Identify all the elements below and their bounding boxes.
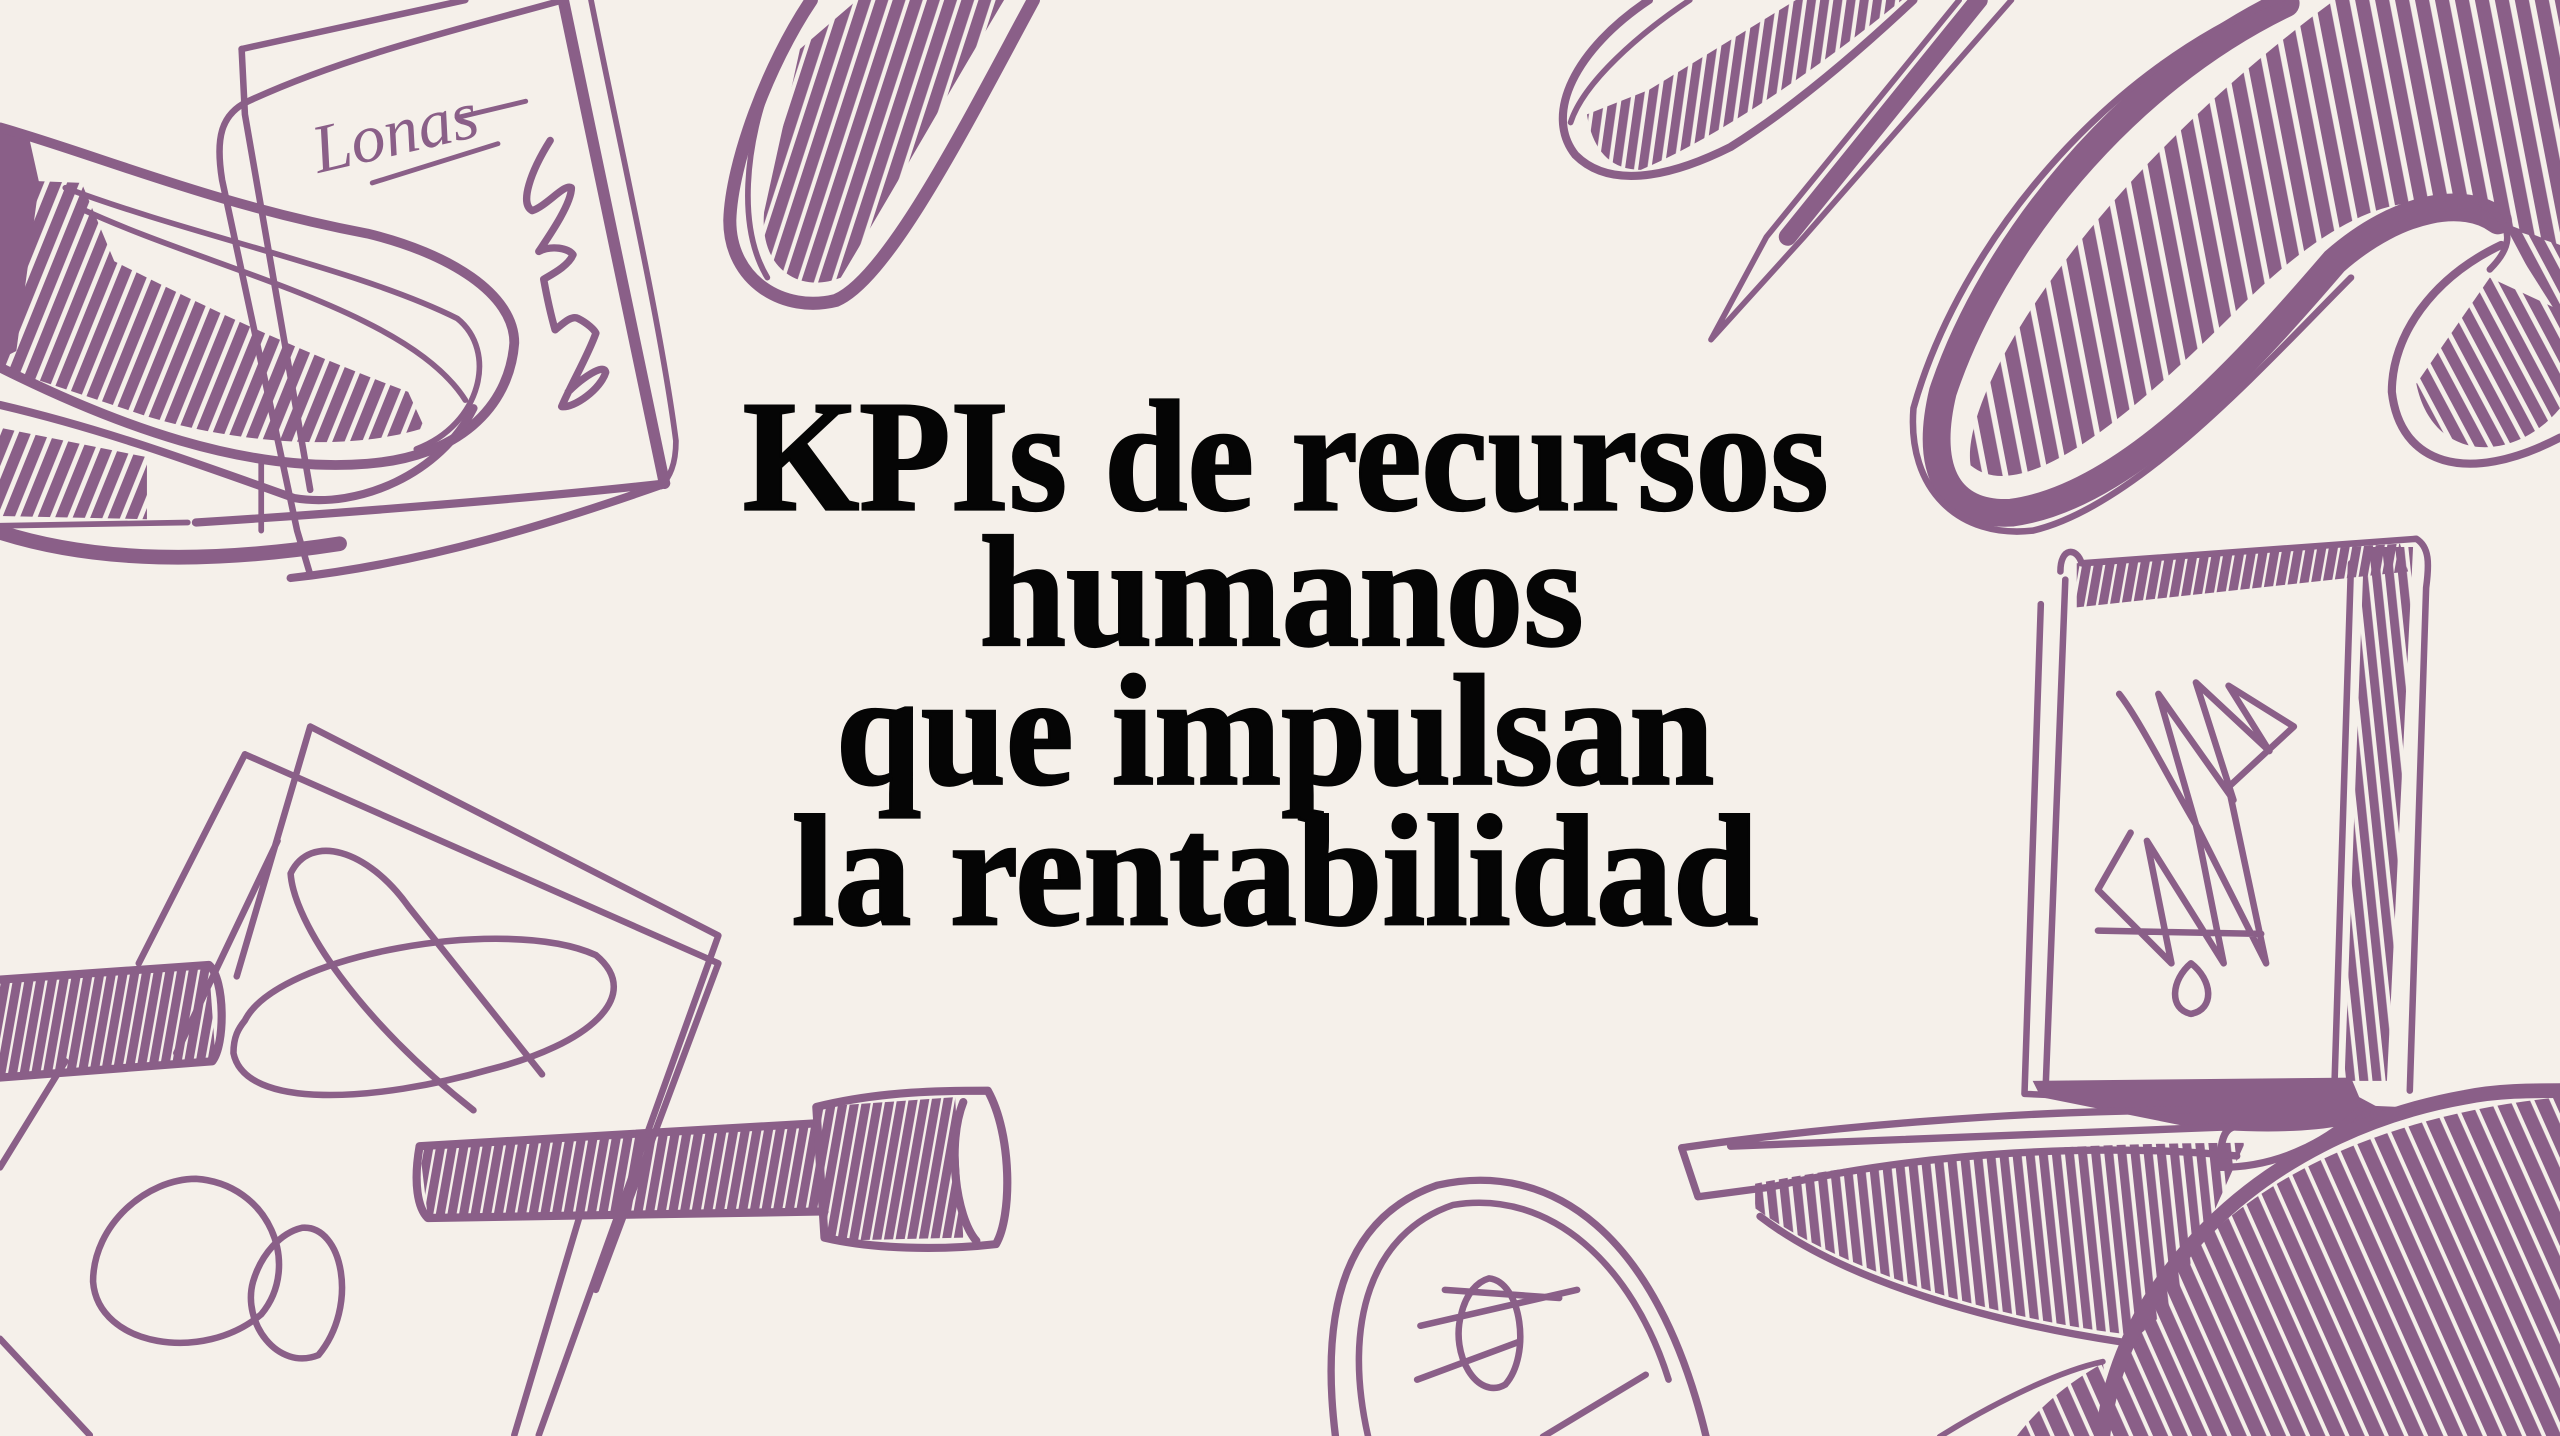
title: KPIs de recursos: [743, 369, 1829, 544]
title: la rentabilidad: [792, 784, 1758, 959]
illustration: brush top center: [730, 0, 1033, 303]
squiggle: [527, 140, 606, 407]
icon: pencil: [1711, 0, 2011, 340]
illustration: brush top right: [1563, 0, 1913, 176]
drop: [2175, 963, 2208, 1014]
illustration: notebook bottom left: [0, 727, 718, 1435]
illustration: laptop base: [1682, 1078, 2384, 1342]
icon: pencil bottom: [417, 1091, 1007, 1248]
scribble: [2098, 682, 2294, 963]
illustration: brush left: [0, 127, 514, 557]
coin symbol: [1417, 1278, 1577, 1388]
illustration: notebook top left: [196, 0, 676, 578]
title: [743, 369, 1829, 959]
illustration: large hatched dome: [1940, 1091, 2560, 1436]
title: humanos: [980, 505, 1584, 680]
illustration: bottom center device: [1331, 1180, 1706, 1436]
handwritten label: Lonas: [304, 76, 485, 188]
icon: pencil left: [0, 965, 222, 1078]
title: que impulsan: [836, 644, 1714, 819]
illustration: large brush right: [1913, 0, 2560, 532]
doodle loops: [233, 851, 614, 1110]
illustration: tablet: [2024, 539, 2428, 1110]
